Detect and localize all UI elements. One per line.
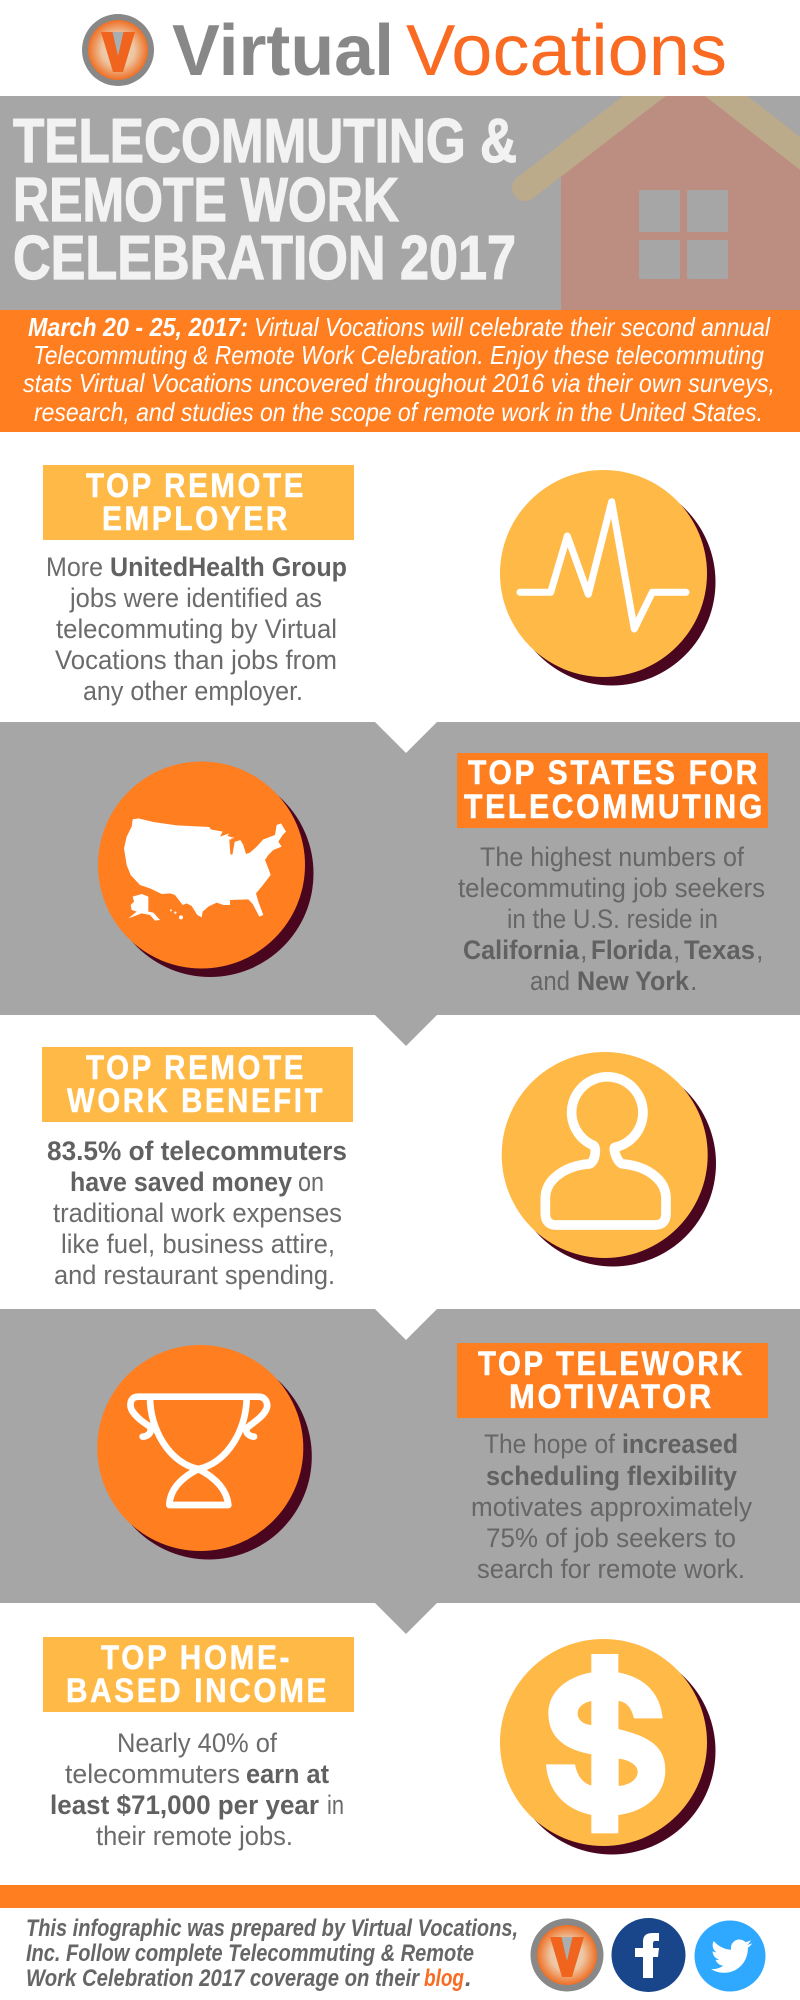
- icon: Virtual Vocations badge: [82, 14, 154, 86]
- text block: have saved money: [70, 1167, 292, 1197]
- heading: BASED INCOME: [66, 1672, 329, 1710]
- text block: [47, 1136, 347, 1290]
- text block: least $71,000 per year: [50, 1790, 319, 1820]
- heading: [43, 465, 354, 540]
- text block: ,: [673, 935, 681, 965]
- heading: TOP STATES FOR: [468, 754, 760, 792]
- text block: traditional work expenses: [53, 1198, 342, 1228]
- panel: intro banner: [0, 310, 800, 432]
- text block: Nearly 40% of: [117, 1728, 277, 1758]
- wordmark: [172, 11, 727, 91]
- text block: telecommuting job seekers: [458, 873, 765, 903]
- heading: [43, 1637, 354, 1712]
- footer text: .: [465, 1965, 472, 1992]
- icon: house: [525, 84, 800, 310]
- title: CELEBRATION 2017: [13, 224, 516, 293]
- icon: Facebook: [612, 1918, 686, 1992]
- heading: TOP HOME-: [101, 1639, 292, 1677]
- text block: scheduling flexibility: [486, 1461, 737, 1491]
- heading: [42, 1047, 353, 1122]
- panel: top telework motivator: [0, 1309, 800, 1634]
- title: TELECOMMUTING &: [13, 107, 517, 176]
- text block: like fuel, business attire,: [61, 1229, 335, 1259]
- footer band: [0, 1885, 800, 1908]
- footer text: This infographic was prepared by Virtual Vocations,: [26, 1915, 518, 1942]
- panel: top home-based income: [43, 1637, 716, 1854]
- panel: top remote employer: [43, 465, 716, 706]
- text block: UnitedHealth Group: [110, 552, 347, 582]
- title: [13, 107, 517, 293]
- text block: [50, 1728, 344, 1851]
- heading: TELECOMMUTING: [464, 788, 765, 826]
- icon: Virtual Vocations badge small: [530, 1918, 604, 1992]
- icon: pulse line: [500, 470, 716, 686]
- text block: increased: [622, 1429, 738, 1459]
- icon: person: [502, 1052, 716, 1266]
- heading: WORK BENEFIT: [67, 1082, 325, 1120]
- text block: on: [298, 1167, 324, 1197]
- heading: TOP TELEWORK: [478, 1345, 745, 1383]
- text block: and: [530, 966, 570, 996]
- text block: [471, 1429, 752, 1584]
- text block: 83.5% of telecommuters: [47, 1136, 347, 1166]
- text block: The highest numbers of: [480, 842, 744, 872]
- wordmark: Virtual: [172, 11, 394, 91]
- text block: telecommuters: [65, 1759, 240, 1789]
- icon: trophy: [97, 1345, 312, 1560]
- text block: .: [690, 966, 698, 996]
- text block: More: [46, 552, 103, 582]
- intro text: [23, 312, 775, 427]
- heading: EMPLOYER: [102, 500, 290, 538]
- text block: Vocations than jobs from: [55, 645, 337, 675]
- text block: Texas: [684, 935, 755, 965]
- panel: top remote work benefit: [42, 1047, 716, 1290]
- text block: 75% of job seekers to: [486, 1523, 736, 1553]
- heading: [457, 1343, 768, 1418]
- text block: motivates approximately: [471, 1492, 752, 1522]
- text block: ,: [580, 935, 588, 965]
- icon: dollar sign: [500, 1639, 716, 1854]
- text block: earn at: [246, 1759, 329, 1789]
- text block: in the U.S. reside in: [507, 904, 718, 934]
- text block: The hope of: [484, 1429, 615, 1459]
- text block: [458, 842, 765, 996]
- text block: search for remote work.: [477, 1554, 745, 1584]
- intro text: March 20 - 25, 2017:: [28, 312, 248, 342]
- title: REMOTE WORK: [13, 166, 399, 235]
- text block: and restaurant spending.: [54, 1260, 335, 1290]
- footer text: blog: [424, 1965, 464, 1992]
- text block: California: [463, 935, 580, 965]
- text block: in: [327, 1790, 344, 1820]
- heading: TOP REMOTE: [86, 1049, 306, 1087]
- wordmark: Vocations: [406, 11, 727, 91]
- text block: ,: [756, 935, 764, 965]
- heading: [457, 753, 768, 828]
- text block: telecommuting by Virtual: [56, 614, 337, 644]
- panel: top states for telecommuting: [0, 722, 800, 1046]
- icon: Twitter: [694, 1920, 766, 1992]
- footer text: [26, 1915, 518, 1992]
- footer text: Inc. Follow complete Telecommuting & Remote: [26, 1940, 474, 1967]
- text block: Florida: [591, 935, 673, 965]
- text block: New York: [577, 966, 690, 996]
- text block: any other employer.: [83, 676, 303, 706]
- header logo: [82, 11, 727, 91]
- heading: TOP REMOTE: [86, 467, 306, 505]
- panel: hero title: [0, 84, 800, 310]
- text block: their remote jobs.: [96, 1821, 293, 1851]
- footer text: Work Celebration 2017 coverage on their: [26, 1965, 420, 1992]
- heading: MOTIVATOR: [509, 1378, 714, 1416]
- icon: US map: [98, 762, 314, 977]
- text block: jobs were identified as: [69, 583, 322, 613]
- text block: [46, 552, 347, 706]
